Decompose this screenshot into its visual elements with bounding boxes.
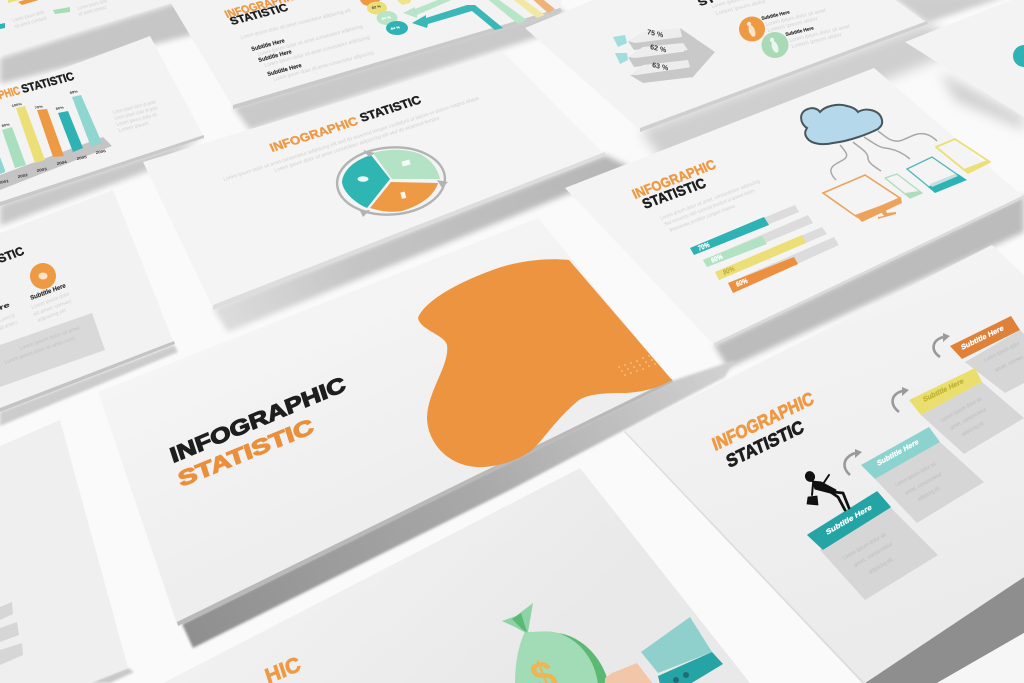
progress bar: 60% (703, 215, 813, 267)
column value labels: 80% (1, 123, 11, 128)
icon: desktop monitor (823, 175, 902, 222)
subtitles and lorem: Lorem ipsum dolor sit amet consectetur adipiscing elit (240, 8, 352, 41)
pie wedge: mint (373, 150, 440, 179)
year axis labels: 2006 (95, 148, 107, 155)
grey note box: Lorem ipsum dolor sit amet (19, 325, 81, 352)
progress bar: 80% (715, 227, 827, 280)
title: pie chart slide: INFOGRAPHIC (267, 114, 360, 155)
step 2 card: Subtitle Here (876, 437, 920, 468)
title: steps slide (710, 389, 817, 472)
subtitles and lorem: Subtitle Here (267, 63, 303, 78)
percent circles: 84 % (390, 25, 401, 31)
3D stacked steps (628, 28, 715, 83)
lorem block: Lorem ipsum (118, 121, 150, 134)
step 1 card: adipiscing elit. (868, 556, 895, 576)
step percent labels (647, 28, 669, 73)
lorem under title: Sed nonummy nibh euismod tincidunt ut laoreet dolore (664, 188, 756, 228)
legend swatch teal (0, 23, 5, 29)
column value labels: 100% (11, 102, 23, 108)
subtitles and lorem: Lorem ipsum dolor (791, 32, 843, 50)
legend lorem: sit amet consect (78, 4, 108, 18)
lorem under title: Lorem ipsum dolor sit amet consectetur adipiscing elit sed do eiusmod tempor incididunt ut labore et dolore magna aliqua (223, 96, 480, 183)
title: cloud slide: INFOGRAPHIC (630, 157, 718, 202)
icon: laptop teal (907, 157, 967, 193)
pie icons (358, 160, 411, 199)
curved arrow 1 (845, 449, 862, 475)
dot pattern (618, 355, 656, 376)
panel: 3D steps slide (525, 0, 928, 132)
icon: money bag (502, 603, 607, 683)
pie wedge: orange (370, 182, 438, 212)
panel: right-top slide (905, 0, 1024, 117)
progress bar: 60% orange (728, 237, 839, 293)
progress bar: 60%: 60% (710, 252, 724, 265)
year axis labels: 2003 (36, 166, 48, 173)
panel: cloud slide (565, 68, 1024, 346)
title: bar chart slide (0, 70, 76, 102)
teal folder (641, 617, 723, 683)
title: STATISTIC: STATISTIC (175, 414, 317, 492)
step percent labels: 63 % (652, 61, 669, 73)
legend lorem: sit amet consect (14, 15, 48, 30)
ring arrowheads (360, 150, 448, 217)
panel: lower-right slide (937, 633, 1024, 683)
subtitles and lorem: Subtitle Here (251, 38, 286, 53)
icon: cloud (801, 105, 882, 144)
subtitles and lorem: sit amet consec (33, 298, 73, 318)
step percent labels: 75 % (647, 28, 664, 40)
panel: left-middle slide (0, 190, 175, 412)
curved arrow 2 (893, 387, 909, 412)
icon: mint person circle (762, 32, 788, 58)
lorem under title: Maecenas porttitor congue massa (669, 203, 736, 234)
title: top-middle slide (222, 0, 298, 27)
column value labels: 60% (55, 106, 65, 111)
step 1 card (808, 492, 938, 600)
lorem under title: Lorem ipsum dolor sit amet consectetur adipiscing elit sed do eiusmod tempor (274, 115, 441, 174)
step 3 card: adipiscing elit. (961, 420, 986, 438)
subtitles and lorem: Lorem ipsum dolor sit amet consectetur adipiscing (257, 24, 364, 58)
subtitles and lorem: Lorem ipsum dolor sit amet (789, 24, 851, 44)
title: cloud slide (630, 157, 718, 212)
panel: top-middle slide (166, 0, 562, 109)
year axis labels: 2004 (56, 159, 68, 166)
pie chart (335, 144, 448, 218)
icon: businessman climbing (803, 469, 849, 510)
step 4 card: Subtitle Here (960, 323, 1005, 352)
subtitles and lorem: Lorem ipsum dolor sit amet (765, 8, 827, 28)
year axis labels (0, 148, 107, 185)
subtitles and lorem: Lorem ipsum dolor (31, 291, 71, 311)
subtitles and lorem: Lorem ipsum dolor (767, 16, 819, 34)
progress bar: 70% (690, 205, 799, 255)
subtitles and lorem: adipiscing elit (37, 308, 67, 324)
title: INFOGRAPHIC: INFOGRAPHIC (167, 372, 349, 468)
subtitles and lorem: Subtitle Here (761, 10, 791, 22)
bar chart columns (0, 95, 102, 174)
subtitles and lorem (240, 8, 375, 83)
panel: top-left slide (0, 0, 190, 55)
lorem block: Lorem ipsum dolor sit amet (114, 105, 159, 122)
grey note box (0, 313, 105, 387)
subtitles and lorem: Subtitle Here (258, 49, 293, 64)
lorem under title (660, 179, 761, 234)
step 1 card: Lorem ipsum dolor sit (842, 532, 887, 562)
curved arrow 3 (934, 333, 950, 357)
peach block (605, 663, 653, 683)
icon: phone yellow (936, 139, 990, 173)
progress bar: 70%: 70% (697, 240, 711, 253)
percent circles (360, 0, 408, 35)
step 2 card: Lorem ipsum dolor sit (894, 461, 937, 489)
progress bar: 60% orange: 60% (735, 276, 749, 289)
grey note box: Lorem ipsum dolor sit amet cons (4, 336, 76, 366)
subtitles and lorem: Lorem ipsum dolor (715, 0, 767, 17)
percent circles: 82 % (371, 4, 382, 10)
teal step arrows (613, 35, 628, 64)
stacked arrows (395, 0, 555, 30)
step 2 card: adipiscing elit. (917, 485, 942, 503)
icon: orange person circle (739, 16, 765, 42)
step 3 card: Lorem ipsum dolor sit (940, 396, 983, 424)
pie wedge: teal (342, 155, 390, 208)
progress bar: 80%: 80% (722, 264, 736, 277)
panel: main cover slide (98, 218, 673, 626)
step 3 card: Subtitle Here (922, 376, 965, 404)
step 2 card (861, 427, 984, 523)
orange blob (418, 259, 672, 467)
icon: teal circle (1013, 45, 1024, 67)
subtitles and lorem: Subtitle Here (785, 26, 815, 38)
panel: bar chart slide (0, 36, 204, 206)
step 3 card: amet, consectetur (949, 407, 988, 432)
title: cloud slide: STATISTIC (640, 175, 708, 212)
panel: lower-left slide (0, 420, 128, 683)
icon: orange circle (30, 263, 56, 289)
lorem block: Lorem ipsum dolor sit (116, 112, 158, 128)
subtitles and lorem: Subtitle Here (30, 282, 67, 302)
percent circles: 64 % (381, 15, 392, 21)
panel: pie chart slide (143, 52, 605, 310)
step 1 card: amet, consectetur (853, 541, 894, 569)
lorem block (112, 99, 159, 134)
title: steps slide: STATISTIC (724, 417, 807, 472)
step 3 card (909, 368, 1024, 454)
icon: phone mint (885, 174, 922, 198)
column value labels: 89% (69, 90, 79, 95)
step percent labels: 62 % (650, 43, 667, 55)
subtitles and lorem (711, 0, 851, 50)
lorem block: Lorem ipsum dolor sit amet (112, 99, 157, 116)
title: bar chart slide: STATISTIC (19, 70, 76, 96)
year axis labels: 2002 (17, 172, 29, 179)
pie outer ring (335, 144, 447, 218)
subtitles and lorem (0, 282, 73, 332)
step 4 card (950, 316, 1024, 393)
legend lorem (12, 0, 109, 30)
step 2 card: amet, consectetur (904, 472, 943, 497)
lorem under title: Lorem ipsum dolor sit amet, consectetuer adipiscing (660, 179, 761, 222)
step 1 card: Subtitle Here (825, 502, 873, 537)
title: pie chart slide: STATISTIC (357, 93, 423, 125)
color strip at top (8, 0, 42, 5)
network wires (831, 131, 937, 180)
grey list bars (0, 602, 23, 665)
legend lorem: Lorem ipsum dolor (12, 9, 46, 24)
year axis labels: 2005 (76, 154, 88, 161)
chart floor (0, 137, 112, 190)
subtitles and lorem: Lorem ipsum dolor sit amet consectetur adipiscing (273, 50, 375, 83)
column value labels (1, 90, 79, 128)
panel: steps slide (624, 245, 1024, 683)
subtitles and lorem: Lorem ipsum dolor sit amet consectetur adipiscing (264, 35, 371, 69)
title: steps slide: INFOGRAPHIC (710, 389, 817, 455)
legend swatch mint (53, 7, 70, 14)
panel: money bag slide (163, 468, 750, 683)
column value labels: 70% (34, 105, 44, 110)
